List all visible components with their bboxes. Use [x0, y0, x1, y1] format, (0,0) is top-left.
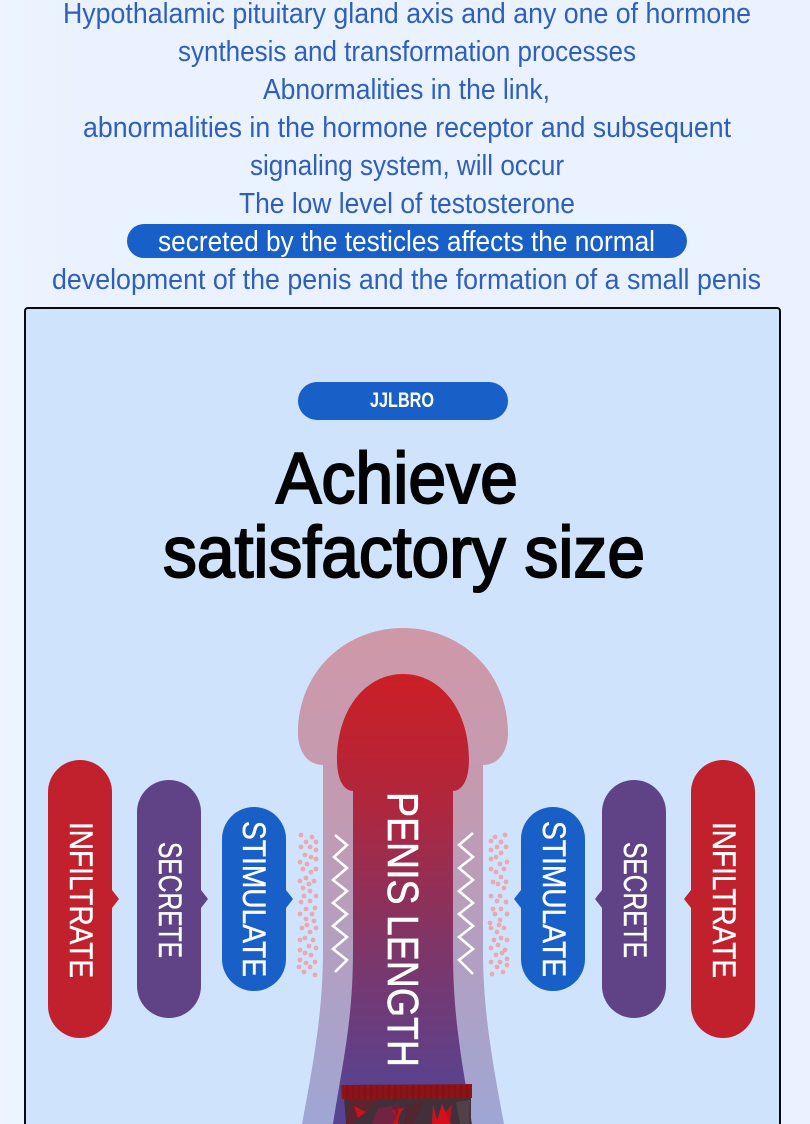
pill: stimulate right: STIMULATE [536, 821, 572, 977]
pill: stimulate right [514, 807, 585, 991]
diagram label: penis length: PENIS LENGTH [378, 792, 427, 1067]
pill: secrete right [595, 780, 666, 1018]
intro text block: signaling system, will occur [250, 150, 564, 182]
intro text block: The low level of testosterone [239, 188, 575, 220]
title: Achieve [276, 439, 518, 519]
panel: achieve satisfactory size [25, 308, 780, 1124]
brand badge: JJLBRO [370, 389, 434, 412]
left dots [297, 833, 318, 977]
pill: infiltrate right [684, 760, 755, 1038]
right zigzag [459, 833, 473, 974]
intro text block: abnormalities in the hormone receptor and subsequent [83, 112, 731, 144]
right dots [488, 833, 509, 976]
pill: secrete left: SECRETE [152, 842, 188, 958]
intro text block: development of the penis and the formation of a small penis [52, 264, 761, 296]
highlighted text line: secreted by the testicles affects the normal [158, 226, 655, 258]
intro text block: Abnormalities in the link, [263, 74, 550, 106]
pill: secrete right: SECRETE [617, 842, 653, 958]
pill: secrete left [137, 780, 208, 1018]
intro text block: synthesis and transformation processes [178, 36, 636, 68]
intro text block [52, 0, 761, 296]
title: satisfactory size [163, 513, 645, 593]
product tube [341, 1084, 472, 1124]
brand badge [298, 382, 508, 420]
pill: infiltrate left [48, 760, 119, 1038]
diagram: original shape [333, 674, 472, 1124]
pill: stimulate left: STIMULATE [236, 821, 272, 977]
pill: infiltrate right: INFILTRATE [706, 822, 742, 978]
diagram: enlarged outline [298, 628, 508, 1124]
pill: infiltrate left: INFILTRATE [63, 822, 99, 978]
title [163, 439, 645, 593]
pill: stimulate left [222, 807, 293, 991]
left zigzag [333, 835, 347, 972]
